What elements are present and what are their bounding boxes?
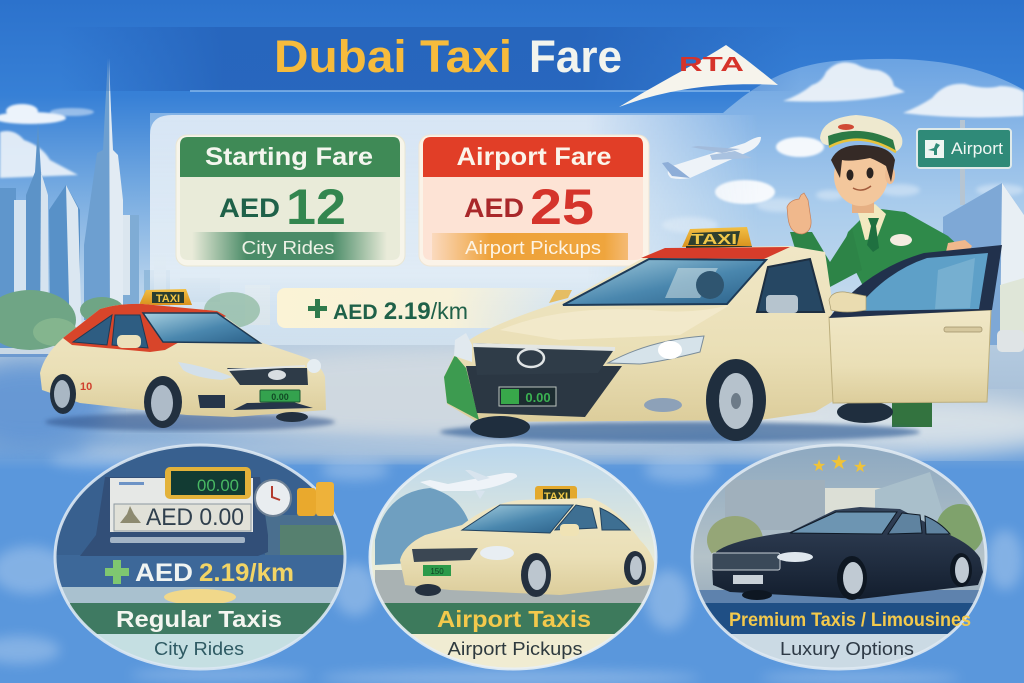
circle: airport taxis	[365, 440, 665, 675]
city skyline	[0, 58, 270, 348]
coins	[297, 482, 334, 516]
main taxi	[440, 227, 1002, 442]
RTA logo: RTA	[679, 54, 744, 76]
limousine	[712, 507, 983, 599]
taxi sign: TAXI	[691, 231, 737, 248]
driver	[787, 115, 985, 427]
taxi sign	[139, 289, 192, 305]
label: city rides: City Rides	[242, 238, 334, 258]
stars	[813, 454, 866, 472]
value: AED 25: AED	[464, 193, 524, 223]
taxi sign: TAXI	[156, 293, 180, 305]
torso	[835, 208, 985, 325]
title	[274, 31, 622, 82]
meter plate: 0.00	[525, 390, 551, 405]
side window	[757, 259, 824, 312]
fog lamp	[644, 398, 682, 412]
wheels	[470, 359, 893, 441]
title: Fare	[529, 31, 622, 82]
wing mirror left	[549, 290, 572, 303]
windshield	[563, 259, 766, 305]
wheels	[50, 374, 308, 428]
heading: airport fare: Airport Fare	[456, 143, 612, 171]
RTA logo	[619, 45, 778, 107]
value: AED 12: 12	[286, 179, 346, 235]
small taxi on the left: 10	[80, 381, 92, 393]
small taxi on the left: 0.00	[271, 392, 289, 402]
heading: starting fare: Starting Fare	[205, 143, 373, 171]
circle: premium taxis	[690, 440, 990, 675]
airport sign	[917, 120, 1011, 205]
value: AED 12: AED	[219, 193, 280, 223]
title band	[60, 27, 800, 92]
thumbs up hand	[787, 193, 811, 234]
panel: fares backdrop	[150, 115, 742, 322]
taxi sign	[535, 486, 577, 500]
terminal	[375, 488, 470, 565]
plane	[420, 473, 517, 491]
clock	[255, 480, 291, 516]
car body	[444, 246, 835, 422]
plane	[662, 137, 761, 179]
neck and face	[852, 195, 874, 213]
taxi sign: TAXI	[544, 491, 568, 503]
title: Dubai Taxi	[274, 31, 512, 82]
value: AED 25: 25	[530, 179, 594, 235]
heading: premium taxis: Premium Taxis / Limousines	[729, 610, 971, 631]
heading: regular taxis: Regular Taxis	[116, 606, 282, 632]
per km rate pill	[277, 288, 567, 328]
airport sign: Airport	[951, 139, 1003, 158]
airport building	[943, 183, 1024, 352]
taxi sign	[682, 227, 752, 249]
grille	[466, 366, 622, 417]
icon: plane square	[925, 140, 944, 158]
circle: airport taxis: 150	[430, 567, 444, 576]
meter device	[80, 477, 268, 556]
green bumper corner	[444, 355, 479, 420]
meter plate	[499, 387, 556, 406]
taxi body	[400, 498, 655, 595]
red roof	[641, 247, 790, 259]
value: AED 25	[464, 179, 594, 235]
digital display	[165, 467, 251, 499]
rate text	[105, 560, 292, 584]
per km rate pill: AED 2.19/km	[333, 298, 468, 325]
stars: ★	[853, 459, 867, 476]
label: luxury options: Luxury Options	[780, 639, 914, 659]
trees	[707, 516, 763, 554]
open door	[829, 245, 1002, 403]
panel: airport fare card	[419, 135, 649, 266]
label: airport pickups: Airport Pickups	[465, 238, 601, 258]
heading: airport taxis: Airport Taxis	[437, 606, 591, 632]
small taxi on the left	[40, 289, 335, 431]
label: city rides: City Rides	[154, 639, 244, 659]
rate text: AED	[135, 559, 193, 587]
rate text: 2.19/km	[199, 559, 294, 587]
legs	[892, 398, 932, 427]
digital display: 00.00	[197, 476, 239, 495]
trees	[0, 290, 260, 350]
building	[725, 472, 945, 530]
stars: ★	[812, 458, 826, 475]
hand on door	[945, 240, 972, 259]
stars: ★	[830, 452, 848, 474]
headlights	[608, 336, 704, 364]
hood highlight	[500, 305, 730, 340]
value: AED 12	[219, 179, 346, 235]
label: airport pickups: Airport Pickups	[448, 639, 582, 659]
panel: starting fare card	[176, 135, 405, 266]
meter device: AED 0.00	[146, 504, 244, 531]
circle: regular taxis	[50, 440, 350, 675]
cap	[820, 115, 902, 152]
